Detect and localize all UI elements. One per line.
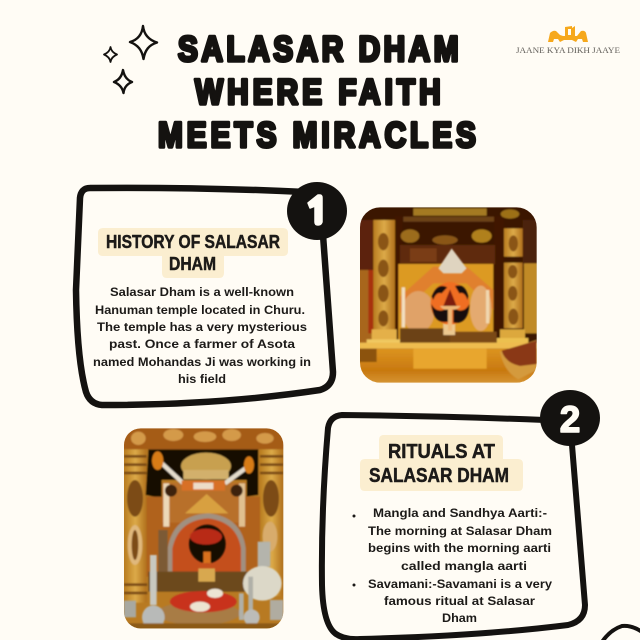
body list 2: Mangla and Sandhya Aarti:- bbox=[373, 506, 547, 520]
heading 2: RITUALS AT bbox=[388, 441, 495, 463]
icon: sparkle stars bbox=[104, 26, 157, 93]
body list 2: The morning at Salasar Dham bbox=[368, 524, 552, 538]
logo: JAANE KYA DIKH JAAYE bbox=[516, 46, 620, 55]
body list 2: Dham bbox=[442, 611, 477, 625]
body list 2: Savamani:-Savamani is a very bbox=[368, 577, 552, 591]
panel: rituals at Salasar Dham bbox=[322, 390, 600, 639]
garland bbox=[160, 462, 250, 483]
bells bbox=[401, 229, 419, 243]
photo: Hanuman idol shrine bbox=[122, 427, 285, 630]
idol face bbox=[431, 282, 469, 331]
body list 2 bbox=[352, 506, 552, 625]
photo: Salasar temple sanctum bbox=[357, 205, 540, 385]
idol face bbox=[189, 525, 226, 563]
draped idol figure bbox=[404, 290, 434, 330]
heading highlight 2 bbox=[360, 435, 523, 491]
title bbox=[158, 30, 476, 155]
heading 1: DHAM bbox=[169, 254, 216, 274]
body text 1: Hanuman temple located in Churu. bbox=[95, 303, 305, 317]
title: SALASAR DHAM bbox=[178, 30, 459, 69]
next card corner peeking at bottom right bbox=[602, 626, 640, 640]
alcove bbox=[398, 264, 493, 344]
arch bbox=[168, 513, 246, 577]
seat bbox=[500, 340, 537, 379]
number badge 2: 2 bbox=[560, 399, 580, 440]
number badge 1 bbox=[287, 182, 347, 240]
heading 2: SALASAR DHAM bbox=[369, 465, 509, 487]
body list 2: begins with the morning aarti bbox=[368, 541, 551, 555]
card outline 1 bbox=[76, 188, 333, 405]
silver vessels bbox=[150, 555, 157, 605]
heading 1 bbox=[106, 232, 280, 274]
logo bbox=[516, 26, 620, 55]
pillars bbox=[373, 220, 395, 330]
body list 2: famous ritual at Salasar bbox=[384, 594, 535, 608]
body text 1: his field bbox=[178, 372, 226, 386]
number badge 2 bbox=[540, 390, 600, 446]
floor bbox=[357, 343, 540, 349]
offerings bbox=[148, 572, 262, 592]
panel: history of Salasar Dham bbox=[76, 182, 347, 405]
icon: logo elephants and arch bbox=[548, 26, 588, 42]
heading highlight 1 bbox=[98, 228, 288, 278]
body text 1: The temple has a very mysterious bbox=[97, 320, 307, 334]
body text 1 bbox=[93, 285, 311, 386]
title: MEETS MIRACLES bbox=[158, 116, 476, 155]
flowers bbox=[400, 328, 450, 343]
side pillars bbox=[124, 449, 147, 603]
dark recess bbox=[146, 449, 258, 498]
body text 1: past. Once a farmer of Asota bbox=[109, 337, 295, 351]
crown bbox=[438, 248, 467, 273]
title: WHERE FAITH bbox=[195, 73, 441, 112]
body text 1: Salasar Dham is a well-known bbox=[110, 285, 294, 299]
body list 2: called mangla aarti bbox=[401, 559, 527, 573]
heading 1: HISTORY OF SALASAR bbox=[106, 232, 280, 252]
body text 1: named Mohandas Ji was working in bbox=[93, 355, 311, 369]
card outline 2 bbox=[322, 415, 585, 639]
umbrella bbox=[181, 453, 231, 479]
heading 2 bbox=[369, 441, 509, 487]
